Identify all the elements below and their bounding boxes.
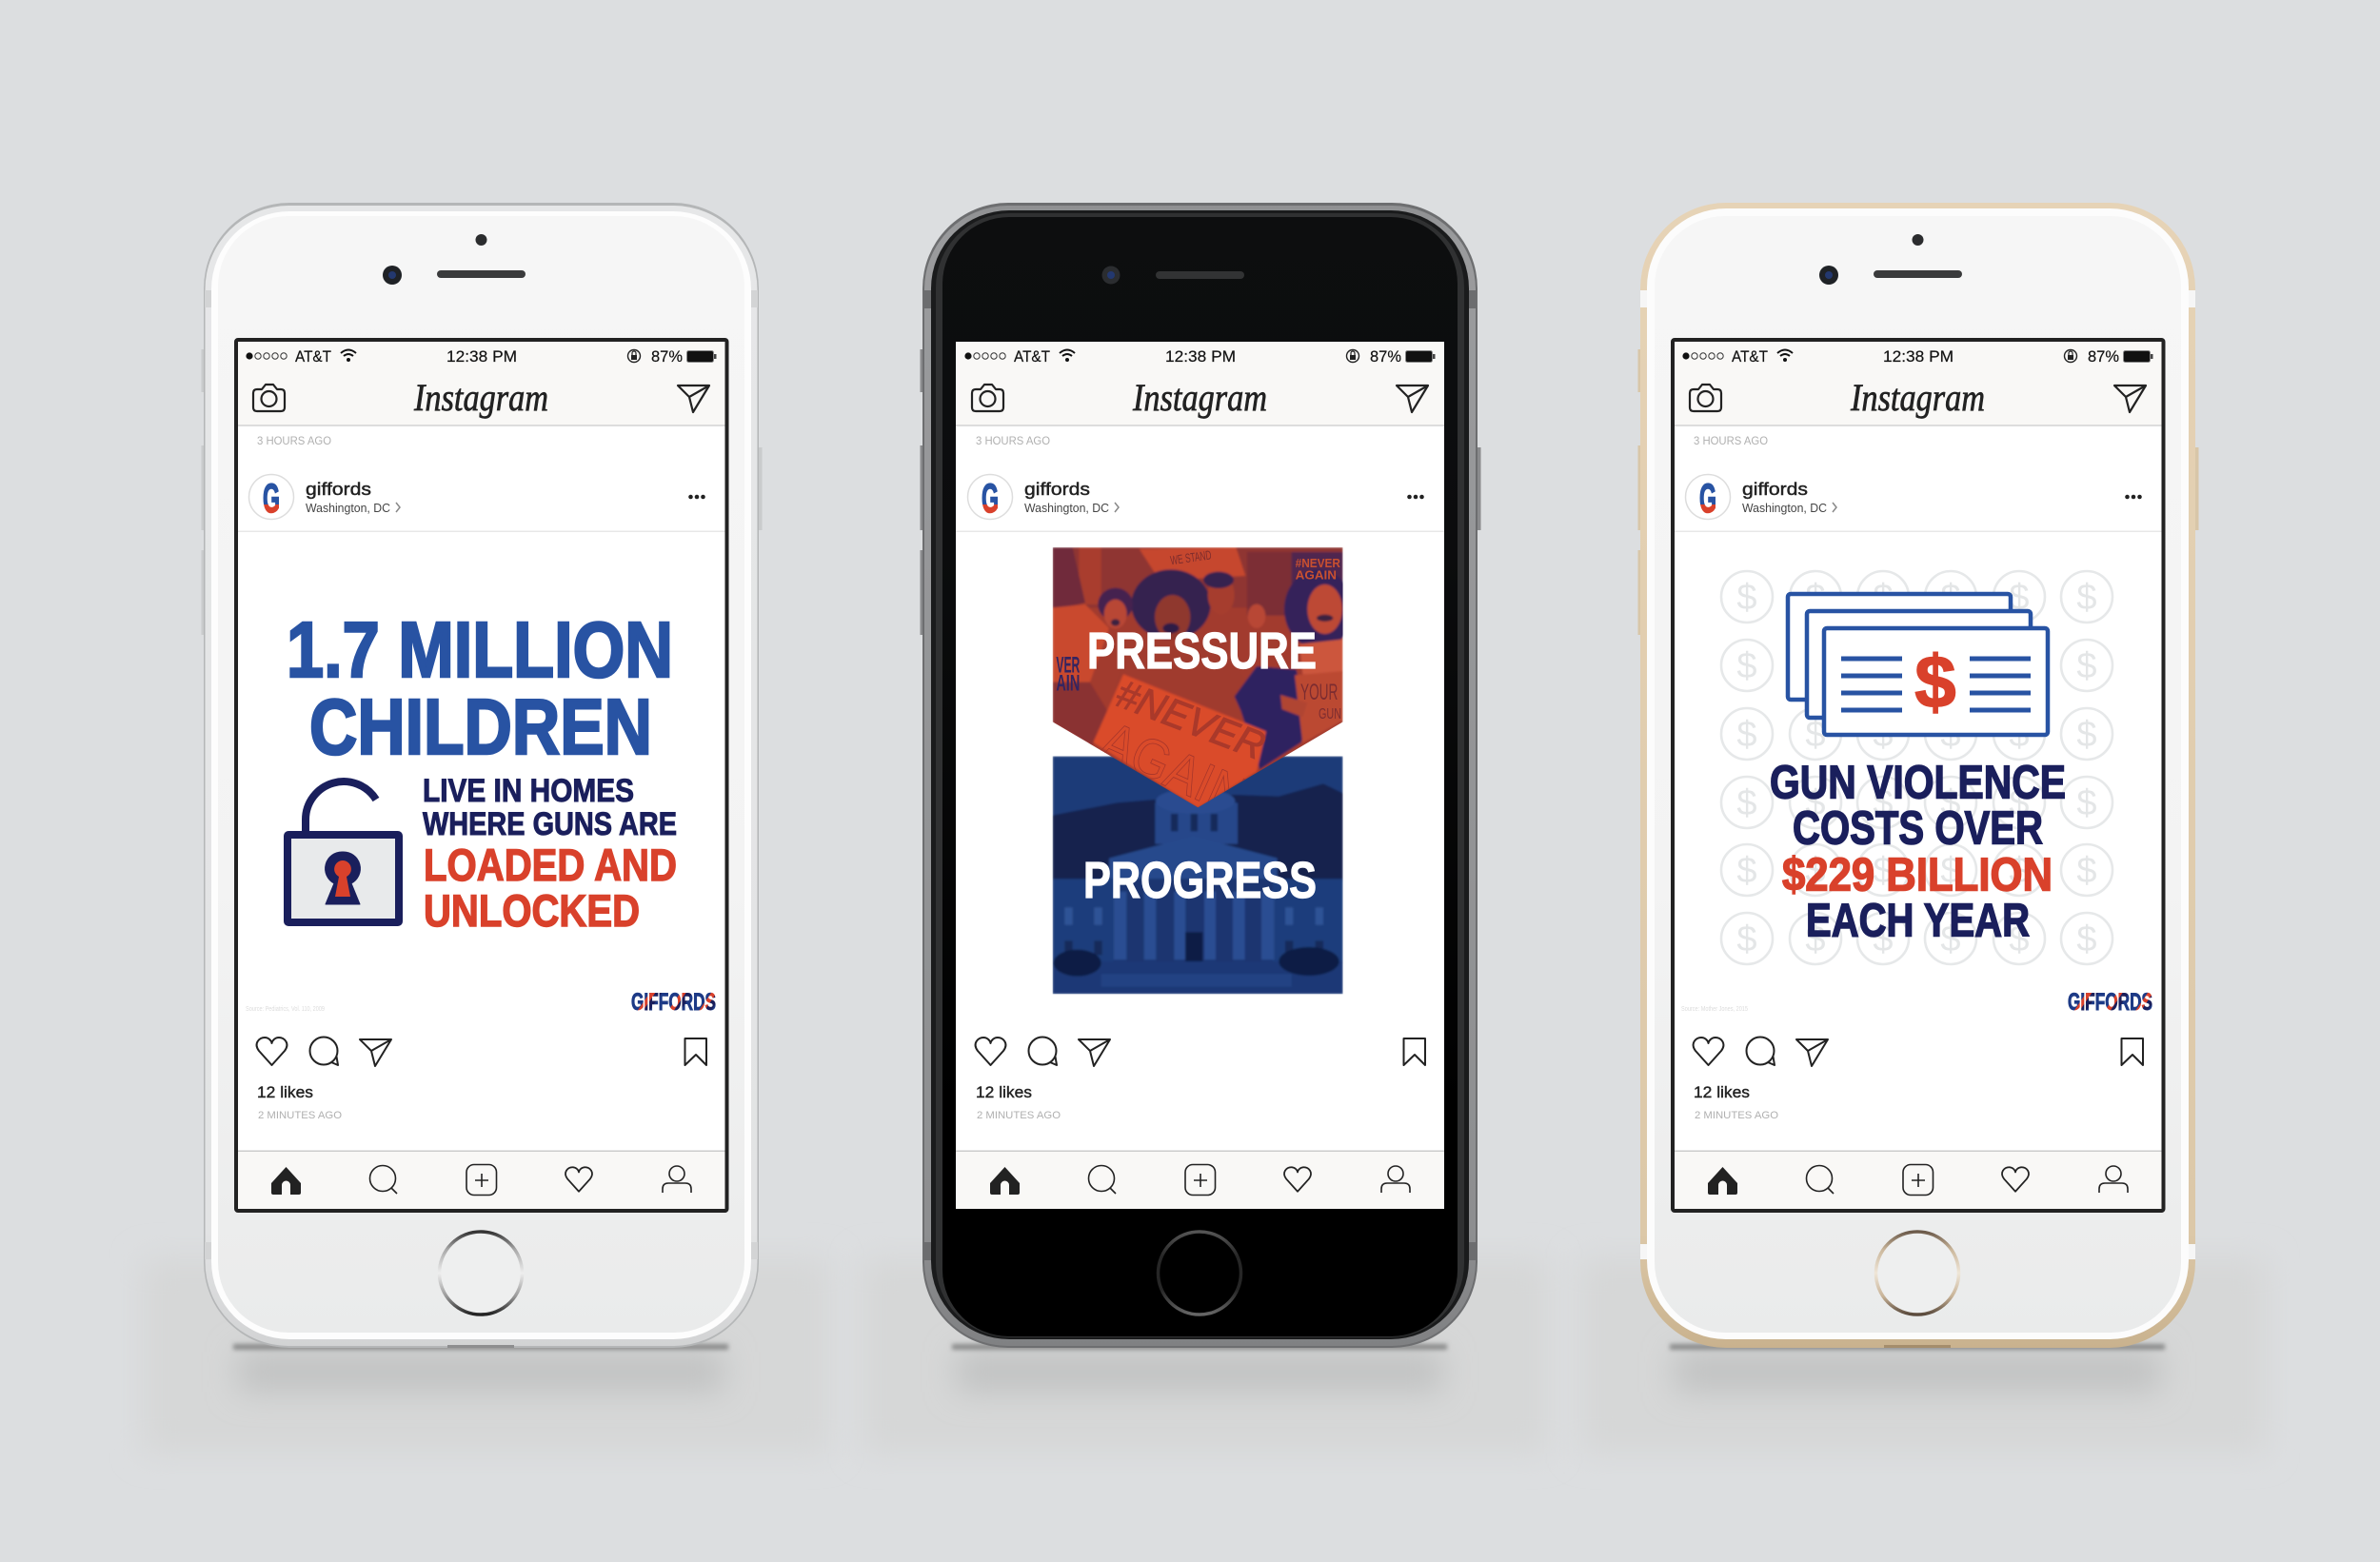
status bar text: 12:38 PM — [1883, 347, 1954, 366]
dollar coin pattern: $ — [1805, 851, 1826, 891]
headline words — [1083, 623, 1317, 909]
screen — [236, 340, 727, 1211]
sign lettering in the photo — [1057, 550, 1340, 801]
icon: open padlock — [288, 781, 399, 922]
sensor, camera and speaker — [1819, 234, 1962, 285]
dollar coin pattern: $ — [1736, 715, 1757, 755]
phone body — [922, 203, 1478, 1348]
account row: giffords — [1742, 480, 1808, 499]
action icons — [257, 1038, 706, 1066]
dollar coin pattern: $ — [1736, 783, 1757, 823]
side buttons — [920, 349, 1481, 635]
home button — [1158, 1232, 1241, 1315]
account row: giffords — [306, 480, 371, 499]
tab bar icons — [271, 1165, 691, 1196]
sensor, camera and speaker — [383, 234, 526, 285]
action icons — [1694, 1038, 2143, 1066]
screen — [1673, 340, 2163, 1211]
dollar coin pattern: $ — [1736, 578, 1757, 618]
floor shadows — [143, 1258, 2267, 1453]
dollar coin pattern: $ — [1873, 715, 1894, 755]
supporting text: UNLOCKED — [424, 885, 640, 936]
dollar coin pattern: $ — [1940, 783, 1961, 823]
instagram header: Instagram — [1850, 376, 1985, 419]
dollar coin pattern: $ — [1873, 578, 1894, 618]
phone 2: space gray iPhone — [920, 203, 1481, 1348]
account row — [1685, 474, 2142, 522]
headline: GUN VIOLENCE — [1770, 758, 2066, 809]
photo: capitol building in blue — [1053, 756, 1343, 994]
sign lettering in the photo: #NEVER — [1110, 671, 1271, 768]
tab bar icons — [1708, 1165, 2128, 1196]
dollar coin pattern: $ — [1940, 646, 1961, 686]
timestamp: 3 HOURS AGO — [976, 434, 1050, 447]
status bar text: 12:38 PM — [446, 347, 517, 366]
status bar text: 87% — [2088, 347, 2119, 366]
tab bar icons — [990, 1165, 1410, 1196]
likes and time: 12 likes — [1694, 1083, 1750, 1101]
headline: EACH YEAR — [1806, 895, 2030, 946]
action icons — [976, 1038, 1425, 1066]
screen — [956, 342, 1444, 1209]
dollar coin pattern: $ — [1736, 919, 1757, 959]
dollar coin pattern: $ — [1940, 578, 1961, 618]
status bar text: 12:38 PM — [1165, 347, 1236, 366]
camera and speaker — [1102, 267, 1244, 284]
timestamp: 3 HOURS AGO — [257, 434, 331, 447]
phone body — [204, 203, 759, 1348]
side buttons — [1637, 349, 2199, 635]
dollar coin pattern: $ — [1873, 783, 1894, 823]
supporting text: LIVE IN HOMES — [423, 773, 634, 809]
likes and time: 2 MINUTES AGO — [258, 1110, 342, 1121]
account row: giffords — [1024, 480, 1090, 499]
status bar text: AT&T — [1732, 347, 1768, 366]
likes and time: 12 likes — [257, 1083, 313, 1101]
supporting text: WHERE GUNS ARE — [423, 806, 677, 842]
status bar text: 87% — [1370, 347, 1401, 366]
source note: Source: Mother Jones, 2015 — [1681, 1006, 1748, 1013]
sign lettering in the photo: #NEVER — [1296, 557, 1340, 570]
account row: G — [1699, 476, 1716, 522]
sign lettering in the photo: AIN — [1056, 671, 1080, 697]
headline words: PROGRESS — [1083, 852, 1317, 909]
dollar coin pattern: $ — [2009, 715, 2030, 755]
dollar coin pattern — [1721, 571, 2112, 964]
dollar coin pattern: $ — [2076, 715, 2097, 755]
dollar coin pattern: $ — [1805, 783, 1826, 823]
post: 1.7 million children — [246, 605, 716, 1016]
phone body — [1640, 203, 2195, 1348]
headline: COSTS OVER — [1793, 803, 2043, 855]
dollar coin pattern: $ — [1873, 646, 1894, 686]
sign lettering in the photo: YOUR — [1300, 680, 1338, 705]
account row: Washington, DC — [306, 501, 390, 515]
dollar coin pattern: $ — [2009, 851, 2030, 891]
dollar coin pattern: $ — [1736, 646, 1757, 686]
dollar coin pattern: $ — [2009, 578, 2030, 618]
instagram header — [1690, 376, 2146, 419]
headline: CHILDREN — [309, 682, 652, 771]
dollar coin pattern: $ — [1873, 851, 1894, 891]
dollar coin pattern: $ — [2009, 919, 2030, 959]
home button — [1875, 1232, 1959, 1315]
account row — [967, 474, 1424, 522]
instagram header — [972, 376, 1428, 419]
phone 1: silver iPhone — [202, 203, 762, 1348]
account row: Washington, DC — [1024, 501, 1109, 515]
status bar text: 87% — [651, 347, 683, 366]
dollar coin pattern: $ — [2076, 578, 2097, 618]
supporting text — [423, 773, 677, 936]
sign lettering in the photo: GUN — [1319, 706, 1341, 722]
instagram header: Instagram — [413, 376, 548, 419]
dollar coin pattern: $ — [1805, 919, 1826, 959]
headline — [287, 605, 673, 771]
supporting text: LOADED AND — [424, 840, 677, 890]
dollar coin pattern: $ — [1805, 646, 1826, 686]
dollar coin pattern: $ — [2076, 783, 2097, 823]
status bar text: AT&T — [1014, 347, 1050, 366]
logo: Giffords: GIFFORDS — [2068, 989, 2152, 1016]
instagram header — [253, 376, 709, 419]
home button — [440, 1232, 522, 1315]
timestamp: 3 HOURS AGO — [1694, 434, 1768, 447]
headline: $229 BILLION — [1782, 849, 2053, 900]
account row: Washington, DC — [1742, 501, 1827, 515]
dollar coin pattern: $ — [1940, 919, 1961, 959]
dollar coin pattern: $ — [1736, 851, 1757, 891]
dollar coin pattern: $ — [2009, 783, 2030, 823]
dollar coin pattern: $ — [2076, 646, 2097, 686]
likes and time — [1694, 1083, 1778, 1121]
status bar text: AT&T — [295, 347, 331, 366]
headline words: PRESSURE — [1087, 623, 1317, 680]
icon: stack of bills — [1788, 594, 2048, 735]
logo: Giffords: GIFFORDS — [631, 989, 716, 1016]
dollar coin pattern: $ — [1940, 715, 1961, 755]
phone 3: gold iPhone — [1637, 203, 2199, 1348]
side buttons — [202, 349, 762, 635]
status bar text — [1014, 347, 1401, 366]
likes and time: 2 MINUTES AGO — [1695, 1110, 1778, 1121]
photo: marchers in red — [1053, 547, 1343, 807]
headline — [1770, 758, 2066, 946]
sign lettering in the photo: AGAIN — [1296, 568, 1337, 582]
sign lettering in the photo: VER — [1056, 653, 1080, 679]
account row: G — [982, 476, 999, 522]
post: cost of gun violence — [1681, 571, 2152, 1016]
dollar coin pattern: $ — [1805, 715, 1826, 755]
sign lettering in the photo: AGAIN — [1091, 710, 1256, 828]
dollar coin pattern: $ — [1940, 851, 1961, 891]
source note: Source: Pediatrics, Vol. 110, 2009 — [246, 1006, 325, 1013]
post: pressure and progress — [1053, 547, 1353, 994]
likes and time: 2 MINUTES AGO — [977, 1110, 1061, 1121]
likes and time — [976, 1083, 1061, 1121]
dollar coin pattern: $ — [1873, 919, 1894, 959]
account row — [249, 474, 705, 522]
likes and time: 12 likes — [976, 1083, 1032, 1101]
dollar coin pattern: $ — [2076, 851, 2097, 891]
status bar text — [295, 347, 683, 366]
dollar coin pattern: $ — [2009, 646, 2030, 686]
dollar coin pattern: $ — [1805, 578, 1826, 618]
sign lettering in the photo: WE STAND — [1169, 547, 1212, 567]
status bar text — [1732, 347, 2119, 366]
instagram header: Instagram — [1132, 376, 1267, 419]
dollar coin pattern: $ — [2076, 919, 2097, 959]
headline: 1.7 MILLION — [287, 605, 673, 694]
account row: G — [263, 476, 280, 522]
icon: stack of bills: $ — [1914, 640, 1956, 723]
likes and time — [257, 1083, 342, 1121]
